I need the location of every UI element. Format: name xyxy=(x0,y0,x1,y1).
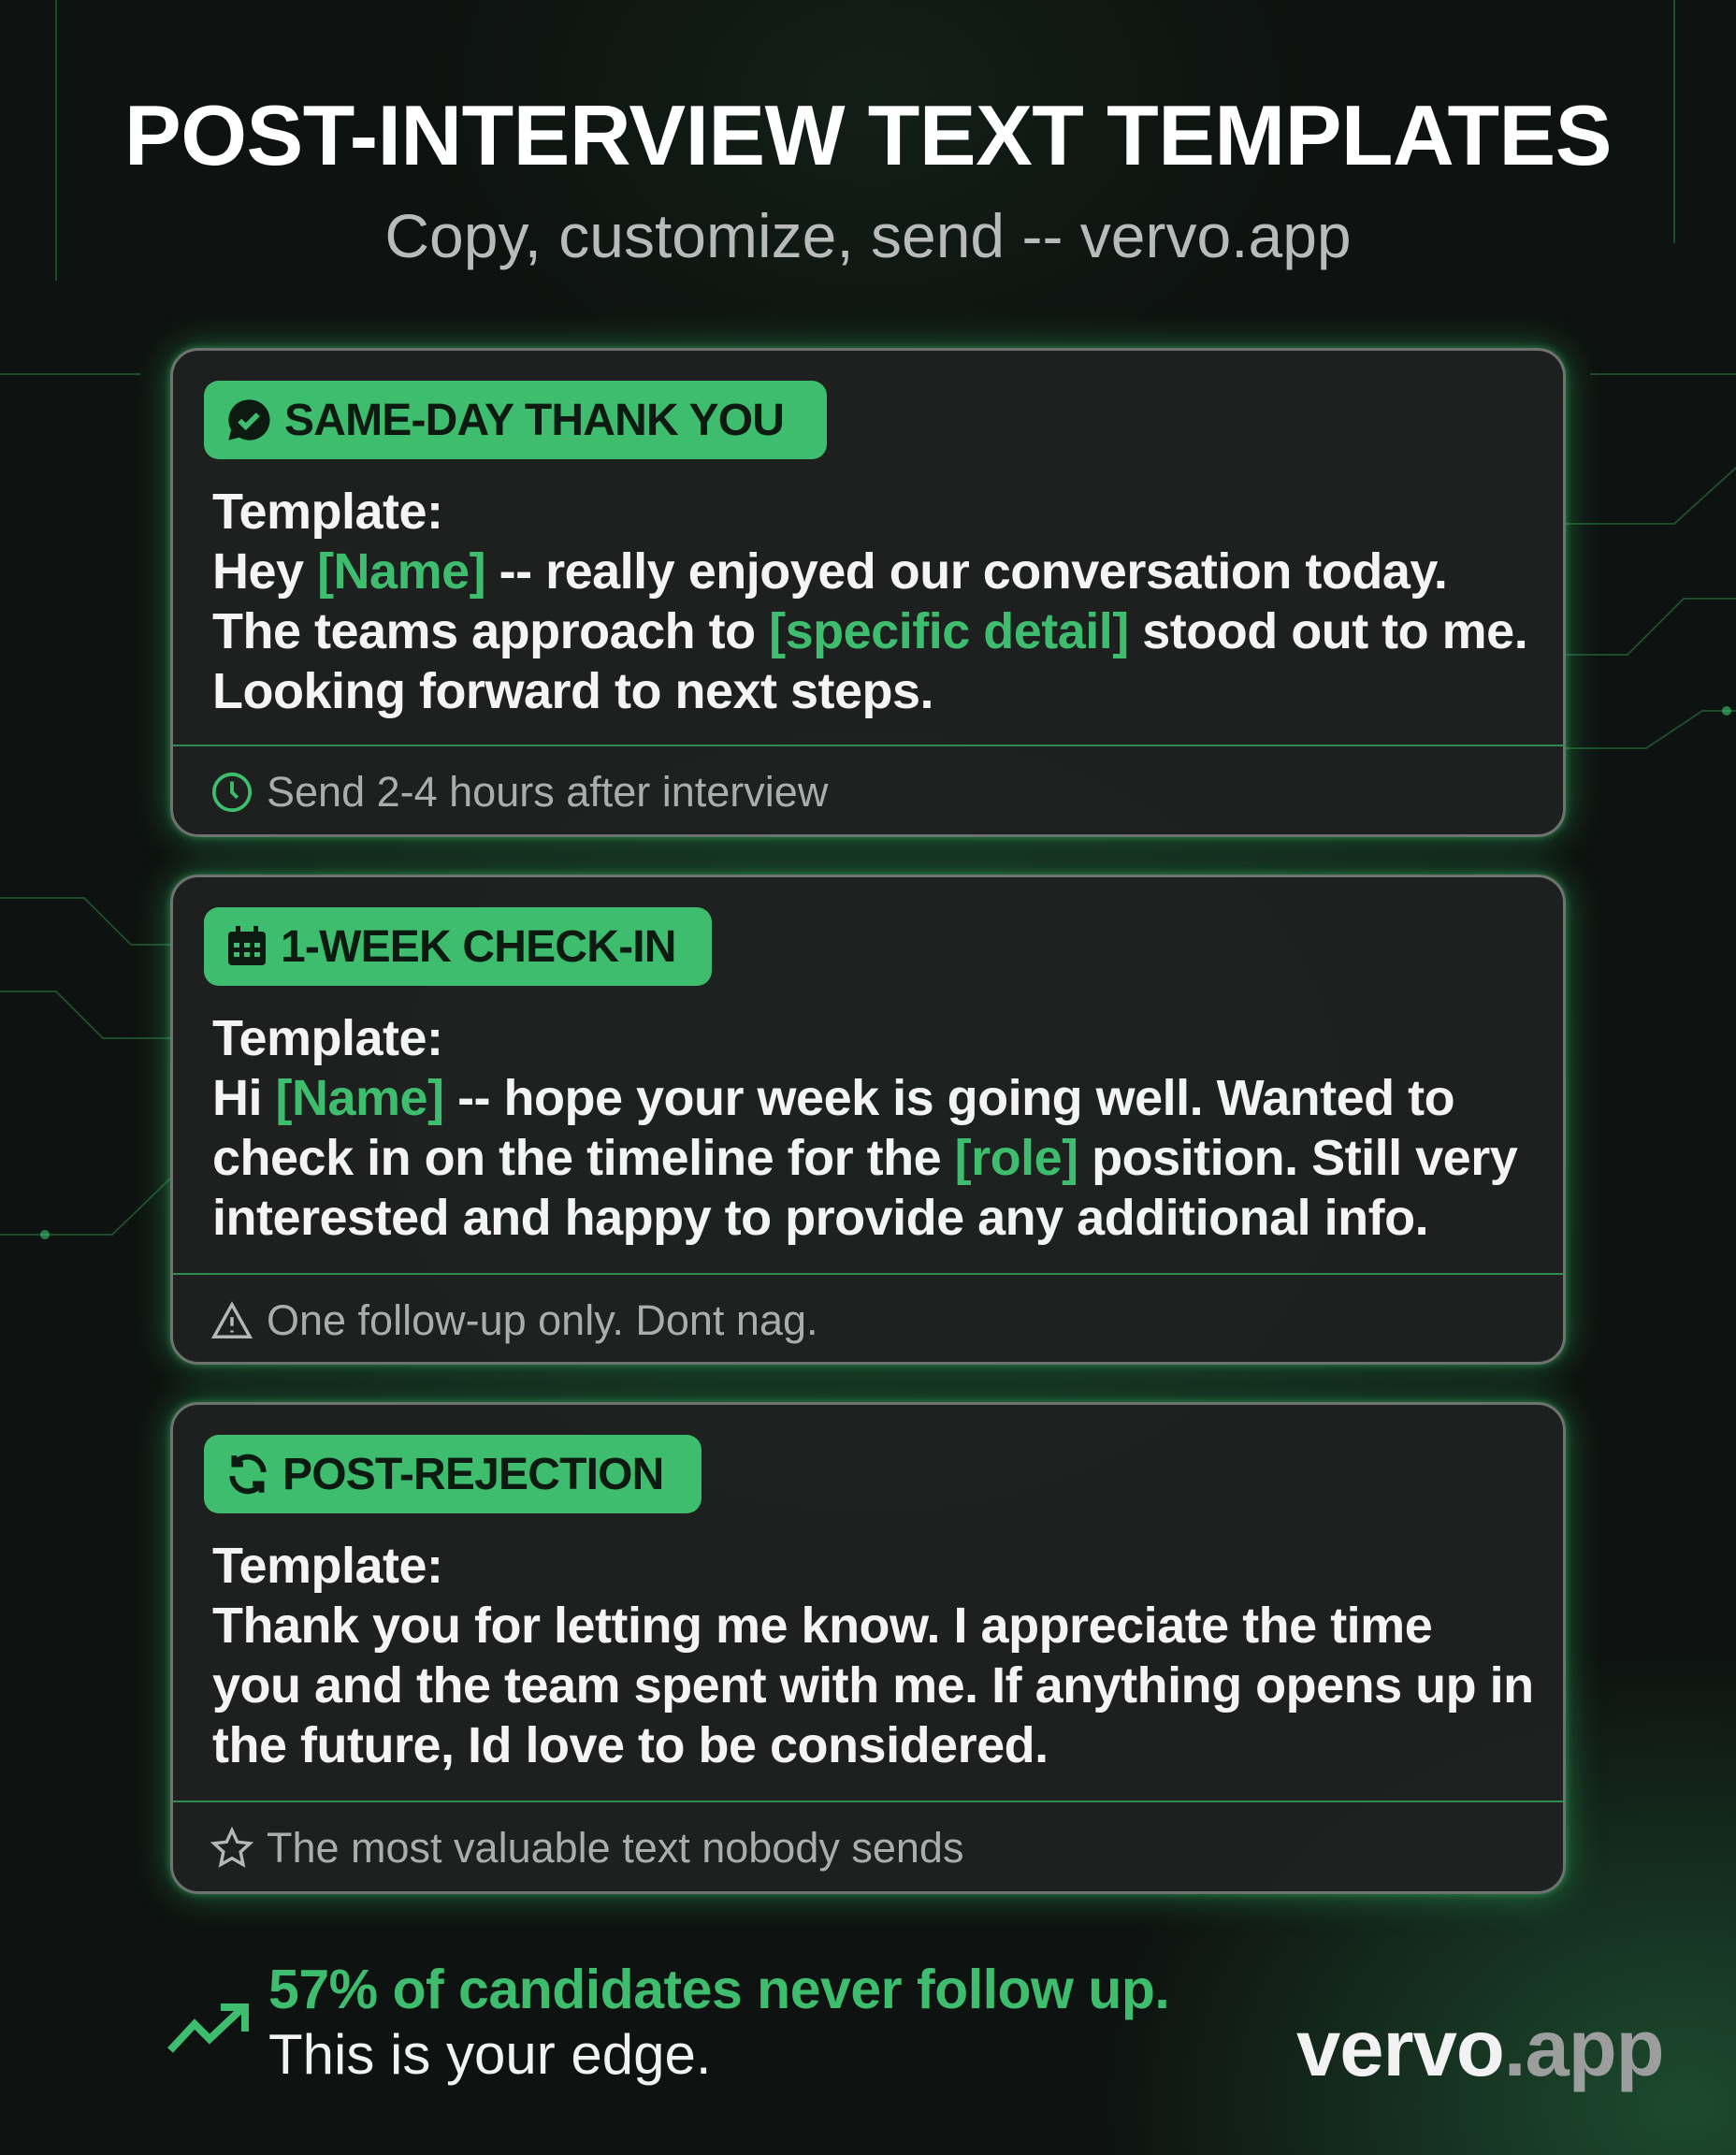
stat callout: This is your edge. xyxy=(268,2023,712,2086)
footer note: warning: One follow-up only. Dont nag. xyxy=(267,1296,818,1344)
template text: Template: xyxy=(212,1538,443,1594)
template text: Thank you for letting me know. I appreciate the time xyxy=(212,1598,1432,1654)
template text: Looking forward to next steps. xyxy=(212,663,933,719)
template text: check in on the timeline for the [role] position. Still very xyxy=(212,1130,1517,1186)
stat callout: 57% of candidates never follow up. xyxy=(268,1959,1169,2020)
badge: post-rejection: POST-REJECTION xyxy=(282,1450,664,1498)
template text: Template: xyxy=(212,1010,443,1066)
badge: 1-week check-in: 1-WEEK CHECK-IN xyxy=(281,922,676,971)
template text: interested and happy to provide any additional info. xyxy=(212,1190,1428,1246)
badge: same-day thank you: SAME-DAY THANK YOU xyxy=(284,395,784,445)
template text xyxy=(212,1010,1517,1246)
template text: the future, Id love to be considered. xyxy=(212,1717,1049,1773)
panel: 1-week check-in xyxy=(170,875,1566,1365)
title: POST-INTERVIEW TEXT TEMPLATES xyxy=(124,89,1612,183)
template text: Template: xyxy=(212,484,443,540)
subtitle: Copy, customize, send -- vervo.app xyxy=(384,201,1352,270)
template text: you and the team spent with me. If anything opens up in xyxy=(212,1657,1534,1714)
template text: Hi [Name] -- hope your week is going well. Wanted to xyxy=(212,1070,1454,1126)
template text xyxy=(212,1538,1534,1773)
brand logo: vervo.app xyxy=(1296,2004,1664,2093)
panel: same-day thank you xyxy=(170,348,1566,837)
icon: trending arrow xyxy=(167,2003,249,2053)
template text: Hey [Name] -- really enjoyed our conversation today. xyxy=(212,543,1447,600)
footer note: star: The most valuable text nobody sends xyxy=(267,1824,963,1872)
panel: post-rejection xyxy=(170,1402,1566,1894)
badge: same-day thank you xyxy=(204,381,827,459)
stat callout xyxy=(268,1959,1169,2086)
footer note: timing: Send 2-4 hours after interview xyxy=(267,768,828,816)
template text xyxy=(212,484,1527,719)
badge: 1-week check-in xyxy=(204,907,712,986)
template text: The teams approach to [specific detail] stood out to me. xyxy=(212,603,1527,659)
badge: post-rejection xyxy=(204,1435,702,1513)
